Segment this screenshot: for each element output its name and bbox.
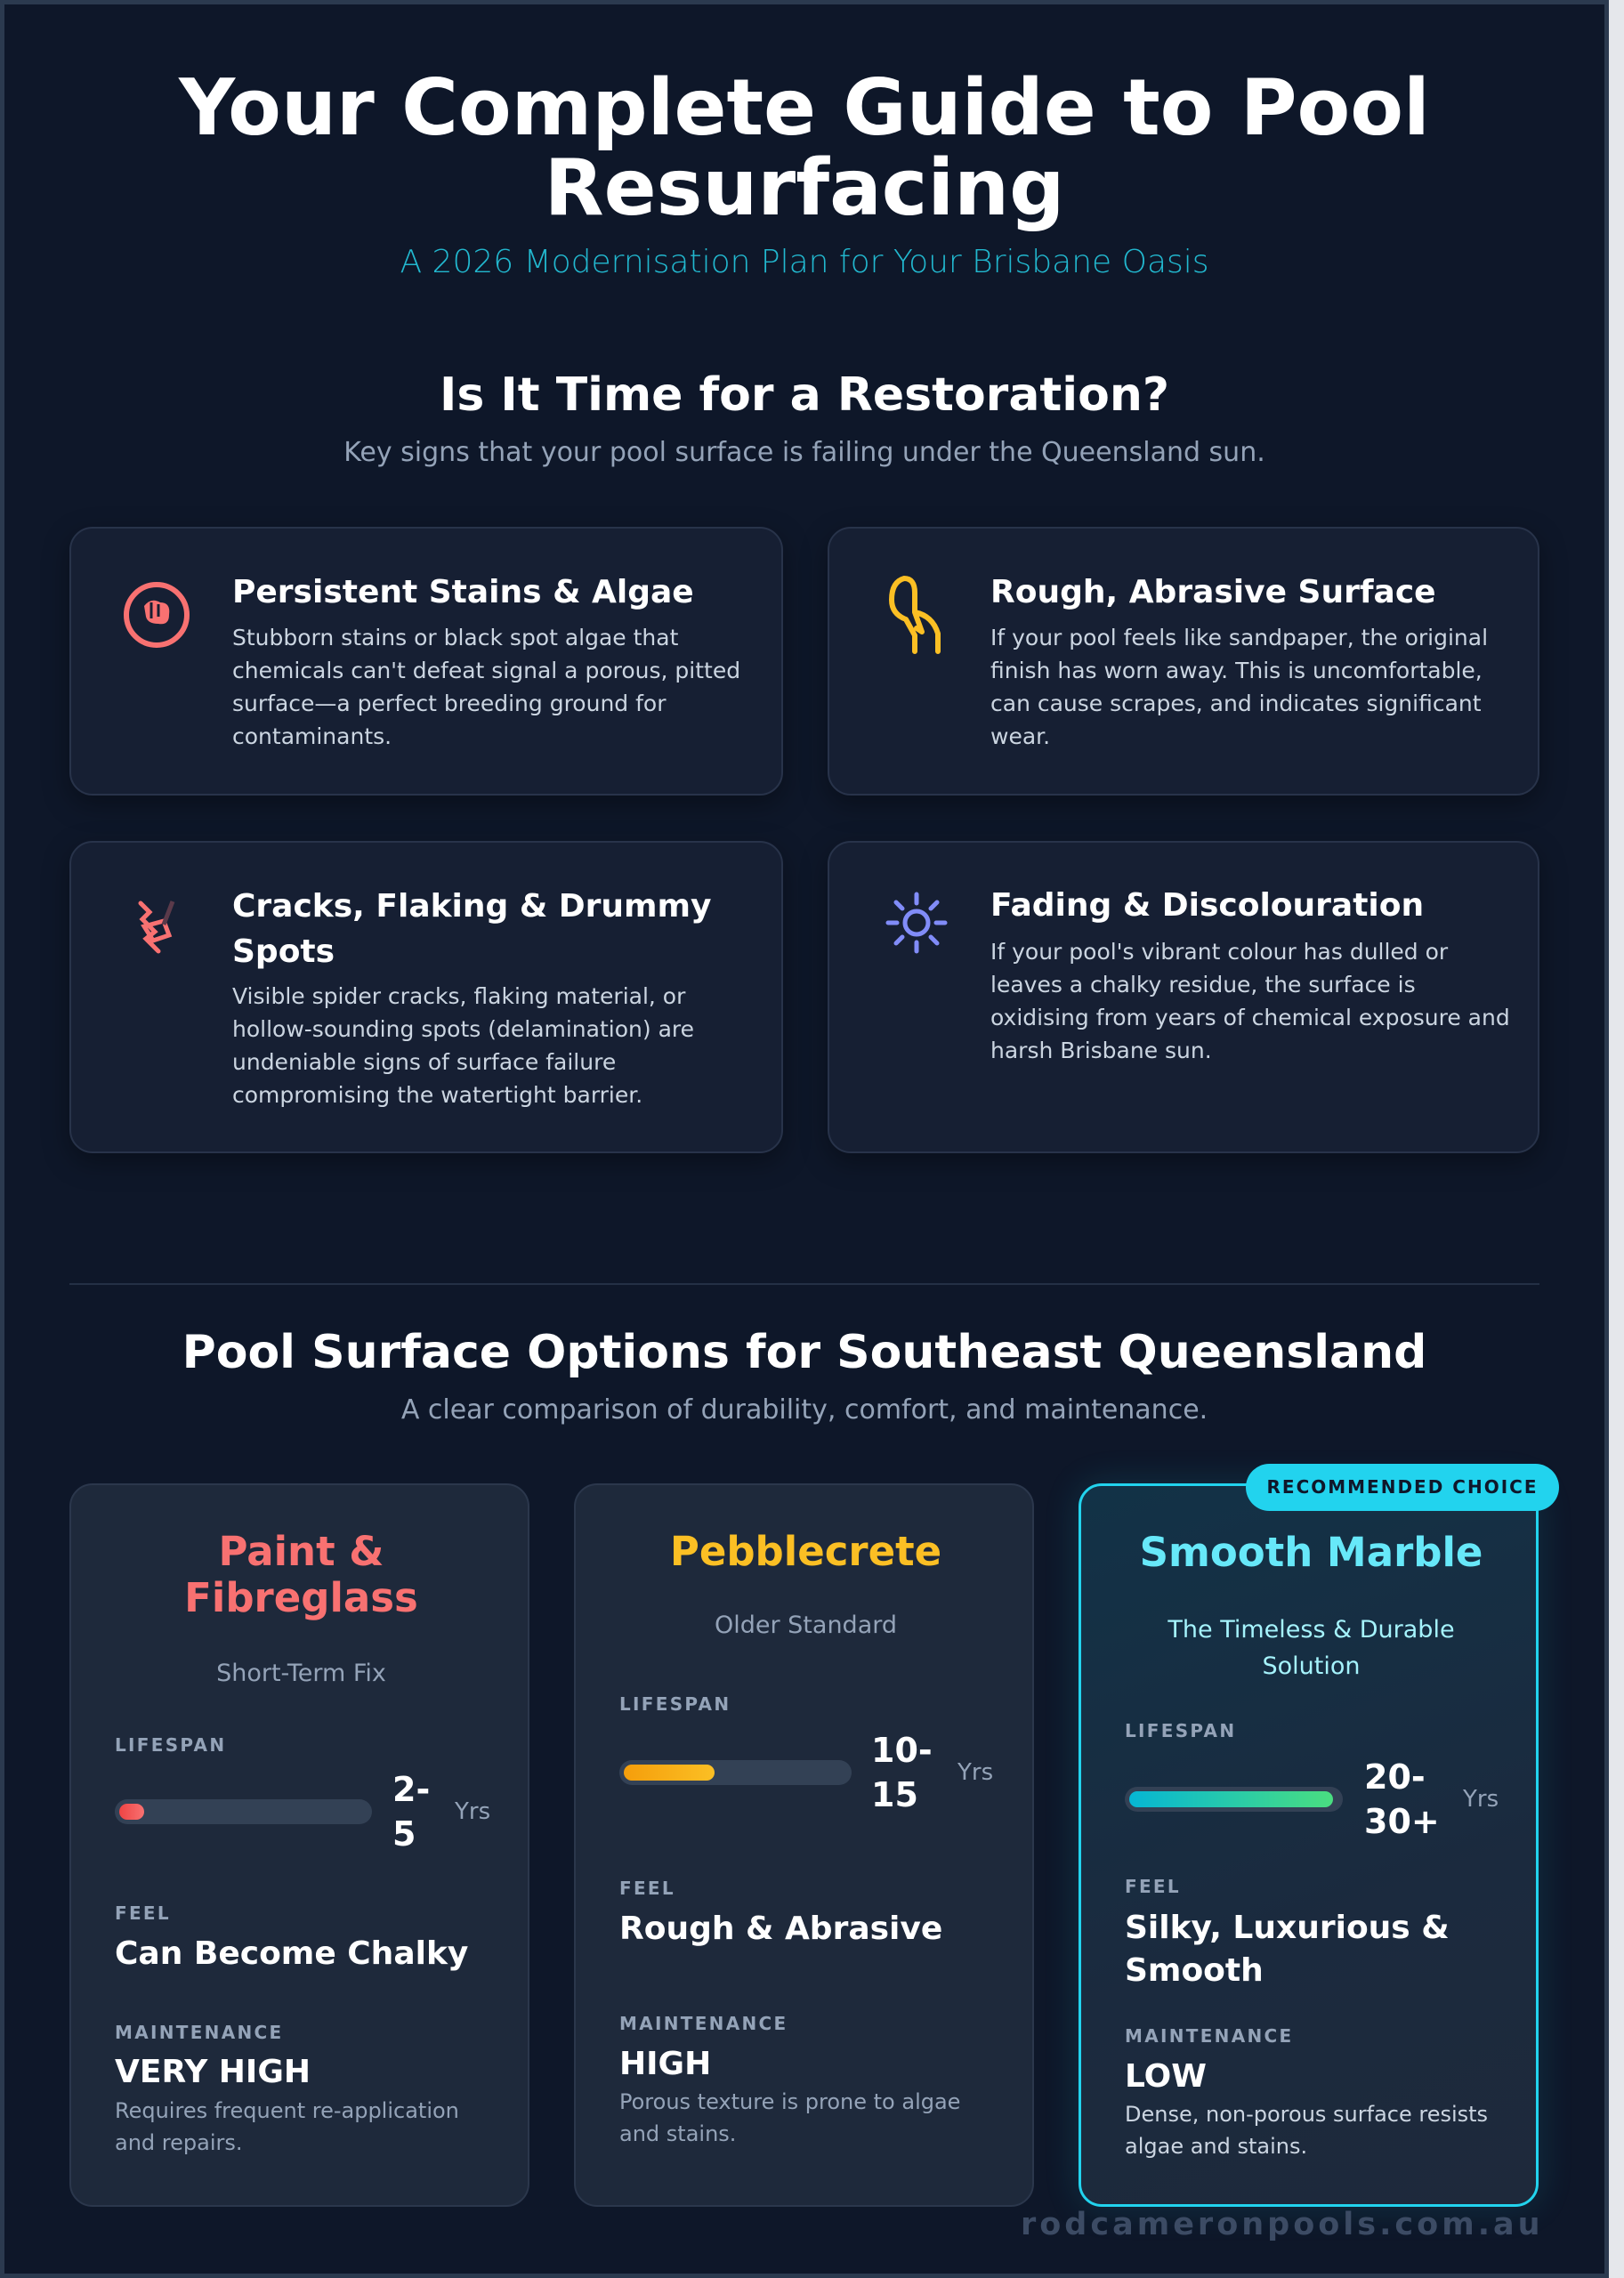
card title [184,1528,418,1621]
panel: paint & fibreglass [69,1483,529,2207]
card subtitle: Older Standard [715,1612,897,1639]
title [178,62,1430,233]
lifespan: LIFESPAN [115,1734,226,1756]
feel: FEEL [1125,1876,1181,1897]
card subtitle: Short-Term Fix [216,1660,386,1687]
panel: paint & fibreglass: Can Become Chalky [115,1935,468,1972]
lifespan bar [115,1799,372,1824]
text: Stubborn stains or black spot algae that chemicals can't defeat signal a porous, pitted surface—a perfect breeding ground for contaminants. [232,625,740,749]
card title: Smooth Marble [1140,1529,1483,1576]
section heading: surface options: Pool Surface Options for Southeast Queensland [182,1326,1426,1379]
section heading: restoration: Is It Time for a Restoration? [440,368,1169,422]
card subtitle: Solution [1262,1652,1360,1680]
card title: Pebblecrete [670,1528,941,1575]
badge: recommended choice [1246,1464,1559,1511]
panel: smooth marble (recommended) [1079,1483,1539,2207]
panel: pebblecrete: HIGH [619,2046,711,2082]
lifespan bar [1125,1787,1343,1812]
section subheading: A clear comparison of durability, comfort, and maintenance. [401,1394,1208,1426]
text: Visible spider cracks, flaking material, or hollow-sounding spots (delamination) are undeniable signs of surface failure compromising the watertight barrier. [232,983,694,1108]
panel: smooth marble (recommended): 30+ [1364,1802,1440,1841]
lifespan bar [619,1760,852,1785]
heading: Cracks, Flaking & Drummy Spots [232,888,712,970]
feel: FEEL [115,1902,171,1924]
heading: Persistent Stains & Algae [232,574,694,610]
icon: sun [886,892,947,954]
heading: Fading & Discolouration [990,887,1424,924]
panel: pebblecrete: Rough & Abrasive [619,1910,942,1947]
lifespan: LIFESPAN [1125,1720,1236,1741]
panel: rough surface [828,527,1539,796]
panel: pebblecrete: 10- [871,1731,933,1770]
watermark: rodcameronpools.com.au [1021,2207,1544,2242]
panel: smooth marble (recommended): Dense, non-porous surface resists algae and stains. [1125,2102,1488,2159]
panel: stains & algae [69,527,783,796]
panel: smooth marble (recommended): Yrs [1463,1786,1499,1813]
panel: pebblecrete: Porous texture is prone to algae and stains. [619,2089,960,2146]
title: Resurfacing [545,142,1064,233]
icon: hand [889,576,941,654]
card subtitle: The Timeless & Durable [1168,1616,1455,1644]
badge: recommended choice: RECOMMENDED CHOICE [1267,1476,1538,1498]
card subtitle [1168,1616,1455,1680]
lifespan: LIFESPAN [619,1693,731,1715]
panel: fading [828,841,1539,1153]
panel: paint & fibreglass: 5 [392,1814,416,1854]
panel: smooth marble (recommended): Silky, Luxurious & Smooth [1125,1910,1450,1989]
title: Your Complete Guide to Pool [179,62,1430,153]
feel: FEEL [619,1878,675,1899]
panel: paint & fibreglass: Yrs [455,1798,490,1825]
icon: stain circle [124,582,190,648]
text: If your pool feels like sandpaper, the original finish has worn away. This is uncomfortable, can cause scrapes, and indicates significant wear. [990,625,1488,749]
card title: Fibreglass [184,1574,418,1621]
panel: smooth marble (recommended): LOW [1125,2058,1207,2095]
panel: smooth marble (recommended): 20- [1364,1757,1426,1797]
panel: pebblecrete: 15 [871,1775,918,1814]
card title: Paint & [218,1528,384,1575]
panel: pebblecrete: Yrs [957,1759,993,1786]
maintenance: MAINTENANCE [115,2022,283,2043]
icon: crack [139,901,174,954]
panel: paint & fibreglass: 2- [392,1770,430,1809]
maintenance: MAINTENANCE [1125,2025,1293,2047]
panel: paint & fibreglass: VERY HIGH [115,2054,311,2090]
subtitle: A 2026 Modernisation Plan for Your Brisbane Oasis [400,244,1209,280]
section subheading: Key signs that your pool surface is failing under the Queensland sun. [343,437,1265,468]
panel: cracks [69,841,783,1153]
maintenance: MAINTENANCE [619,2013,788,2034]
panel: paint & fibreglass: Requires frequent re-application and repairs. [115,2098,459,2155]
heading: Rough, Abrasive Surface [990,574,1436,610]
panel: pebblecrete [574,1483,1034,2207]
text: If your pool's vibrant colour has dulled or leaves a chalky residue, the surface is oxidising from years of chemical exposure and harsh Brisbane sun. [990,939,1510,1063]
